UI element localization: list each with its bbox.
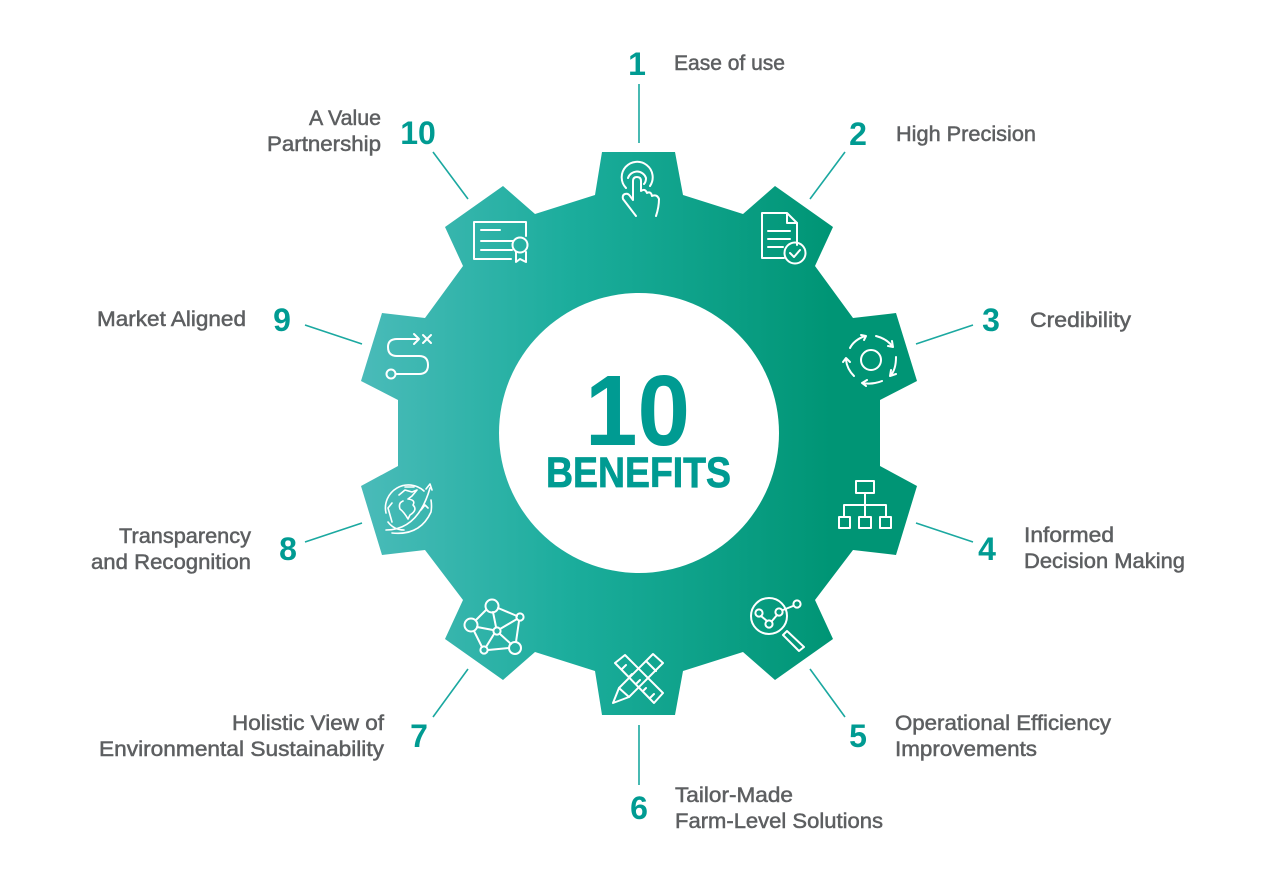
benefit 9 bbox=[97, 302, 291, 338]
benefit 8: Transparency bbox=[119, 525, 252, 548]
benefit 4: Decision Making bbox=[1024, 550, 1185, 573]
benefit 6: 6 bbox=[630, 790, 648, 826]
icon: network nodes bbox=[464, 600, 524, 654]
benefit 9: 9 bbox=[273, 302, 291, 338]
icon: document with check bbox=[762, 213, 806, 264]
benefit 10: Partnership bbox=[267, 133, 381, 156]
icon: ruler and pencil bbox=[613, 654, 663, 703]
benefit 5: 5 bbox=[849, 718, 867, 754]
benefit 8 bbox=[91, 525, 297, 574]
icon: winding route bbox=[386, 334, 431, 378]
benefit 7: Holistic View of bbox=[232, 712, 384, 735]
benefit 4 bbox=[978, 524, 1185, 573]
center title: BENEFITS bbox=[546, 449, 731, 497]
benefit 4: Informed bbox=[1024, 524, 1114, 547]
benefit 10: 10 bbox=[400, 115, 436, 151]
center title bbox=[546, 355, 731, 497]
benefit 6: Tailor-Made bbox=[675, 784, 793, 807]
benefit 8: 8 bbox=[279, 531, 297, 567]
icon: certificate bbox=[474, 222, 528, 262]
icon: touch hand bbox=[622, 162, 659, 216]
benefit 4: 4 bbox=[978, 531, 996, 567]
benefit 7: 7 bbox=[410, 718, 428, 754]
benefit 1: 1 bbox=[628, 46, 646, 82]
benefit 10: A Value bbox=[309, 107, 381, 130]
icon: globe with orbit bbox=[385, 484, 432, 533]
icon: hierarchy chart bbox=[839, 481, 891, 528]
benefit 10 bbox=[267, 107, 436, 156]
gear bbox=[361, 152, 917, 715]
benefit 2: High Precision bbox=[896, 123, 1036, 146]
center title: 10 bbox=[585, 355, 690, 467]
benefit 5: Operational Efficiency bbox=[895, 712, 1112, 735]
benefit 1 bbox=[628, 46, 785, 82]
benefit 9: Market Aligned bbox=[97, 308, 246, 331]
icon: magnifier with data points bbox=[751, 598, 804, 651]
benefit 3 bbox=[982, 302, 1132, 338]
benefit 6: Farm-Level Solutions bbox=[675, 810, 883, 833]
benefit 7: Environmental Sustainability bbox=[99, 738, 385, 761]
benefit 6 bbox=[630, 784, 883, 833]
benefit 5: Improvements bbox=[895, 738, 1037, 761]
benefit 2 bbox=[849, 116, 1036, 152]
benefit 3: Credibility bbox=[1030, 309, 1132, 332]
benefit 7 bbox=[99, 712, 428, 761]
benefit 1: Ease of use bbox=[674, 52, 785, 75]
benefit 3: 3 bbox=[982, 302, 1000, 338]
benefit 2: 2 bbox=[849, 116, 867, 152]
icon: cycle arrows and circle bbox=[843, 335, 896, 386]
leader lines bbox=[305, 84, 973, 785]
benefit 5 bbox=[849, 712, 1112, 761]
benefit 8: and Recognition bbox=[91, 551, 251, 574]
